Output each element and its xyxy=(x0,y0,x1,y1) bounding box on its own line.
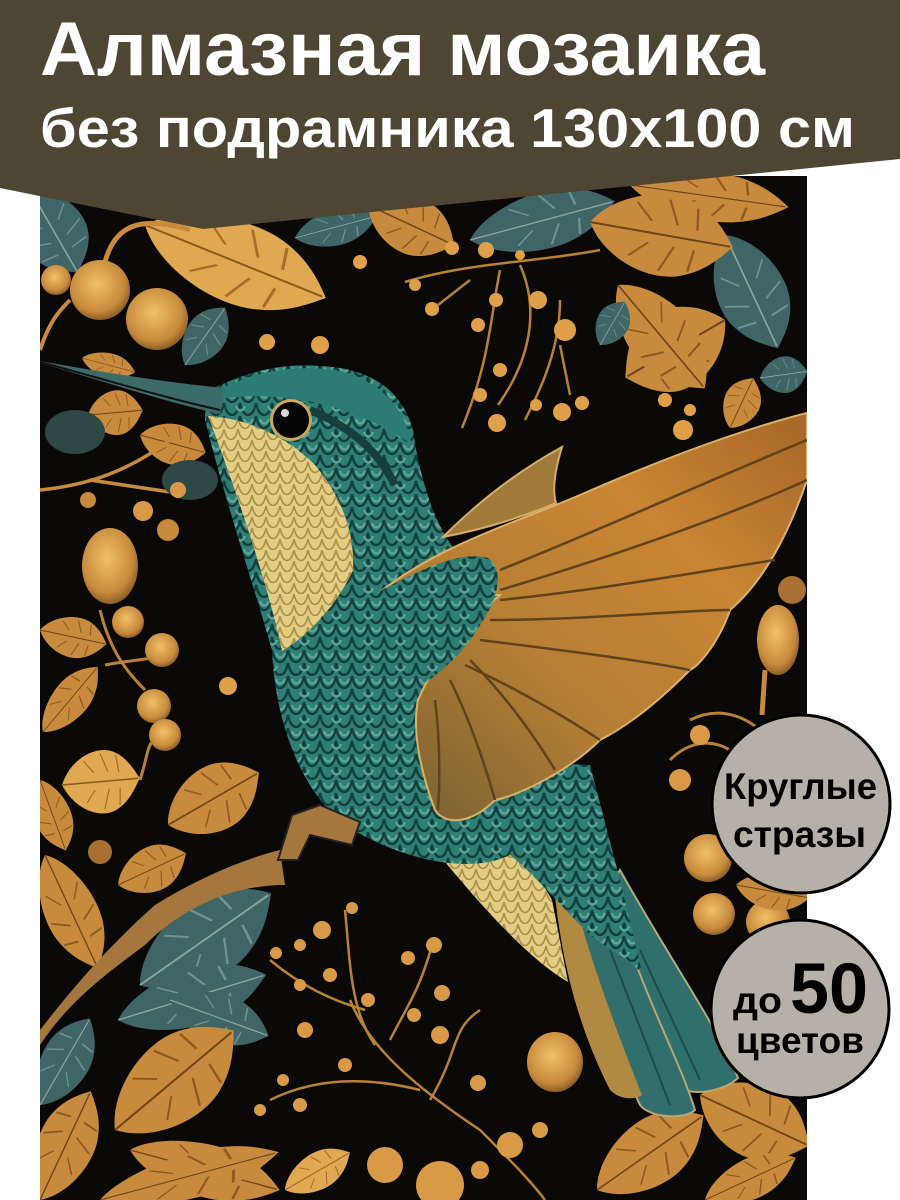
artwork: hummingbird illustration xyxy=(2,161,824,1200)
badge text line 1: Круглые xyxy=(724,766,877,807)
badge: up to 50 colours xyxy=(711,920,889,1098)
foliage: bottom left gold leaves xyxy=(40,1026,350,1200)
feet xyxy=(278,805,360,860)
badge text: colours: цветов xyxy=(736,1020,864,1061)
sprig: bottom berries xyxy=(254,902,583,1200)
foliage: top left xyxy=(40,196,372,366)
tail xyxy=(555,870,738,1116)
foliage: bottom left teal leaves xyxy=(40,888,271,1106)
main wing xyxy=(380,413,807,820)
badge text line 2: стразы xyxy=(733,814,866,855)
title line 1: Алмазная мозаика xyxy=(40,7,766,92)
head detail and eye xyxy=(215,368,412,485)
foliage: upper left behind beak xyxy=(40,346,218,541)
throat and chest xyxy=(208,416,353,651)
badge number 50: 50 xyxy=(790,950,868,1029)
foliage: top centre and right xyxy=(369,176,807,428)
badge: round rhinestones xyxy=(712,715,890,893)
upper small wing xyxy=(443,447,562,537)
foliage: bottom right xyxy=(596,1082,807,1200)
title line 2: без подрамника 130х100 см xyxy=(40,97,855,159)
header banner xyxy=(0,0,900,229)
artwork background xyxy=(40,176,807,1200)
wing coverts xyxy=(378,556,498,695)
foliage: left column xyxy=(40,528,259,966)
undertail cream feathers xyxy=(445,845,568,982)
wing feather lines xyxy=(435,440,807,810)
foliage: right side buds xyxy=(669,576,813,944)
hummingbird xyxy=(40,361,807,1116)
branch xyxy=(40,850,285,1045)
body xyxy=(205,365,642,972)
badge text: up to: до xyxy=(733,980,782,1021)
beak xyxy=(40,361,225,414)
sprig: top berries xyxy=(219,241,696,695)
title xyxy=(40,7,855,159)
